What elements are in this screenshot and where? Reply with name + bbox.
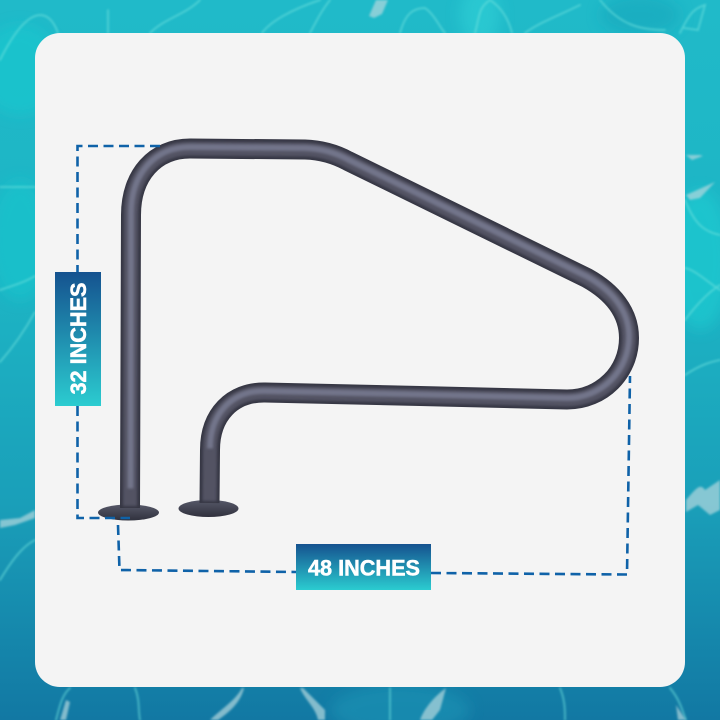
badge: 48 inches: 48 INCHES bbox=[308, 556, 420, 580]
flange: left base bbox=[98, 504, 159, 520]
dashed dimension line: width bbox=[118, 376, 630, 574]
dashed dimension line: height bbox=[78, 146, 160, 518]
flange: right base bbox=[178, 500, 238, 517]
badge: 48 inches bbox=[296, 544, 431, 590]
badge: 32 inches bbox=[55, 272, 101, 406]
handrail: pool rail tube with flanges bbox=[98, 147, 629, 520]
rail tube bbox=[130, 147, 629, 508]
badge: 32 inches: 32 INCHES bbox=[66, 282, 91, 394]
